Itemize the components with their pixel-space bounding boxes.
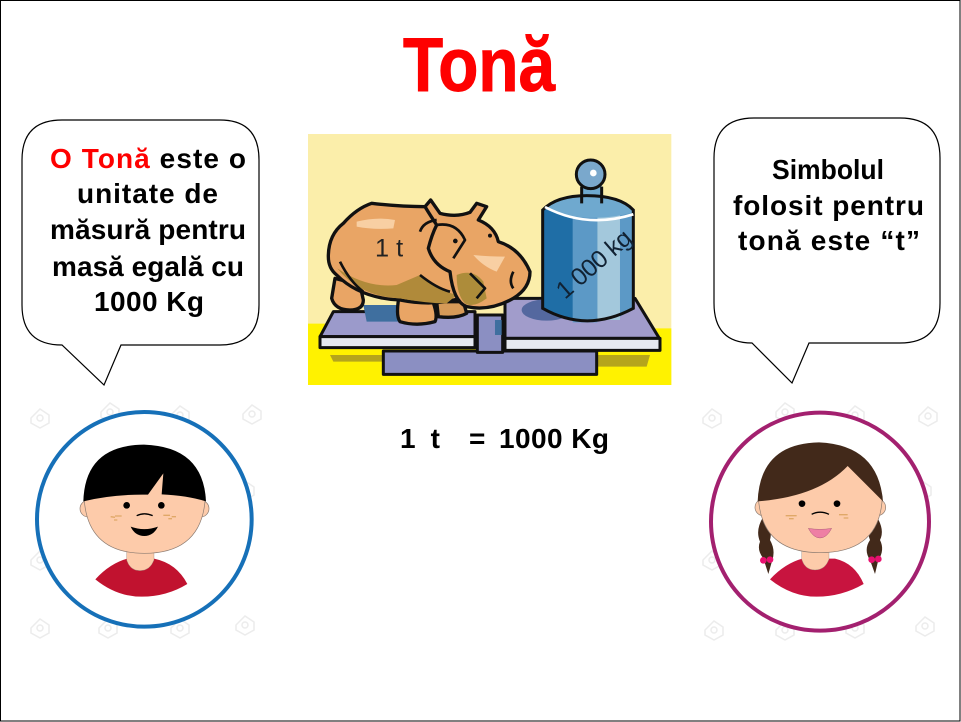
title: Tonă <box>403 23 556 108</box>
speech bubble: symbol: Simbolul <box>772 154 884 185</box>
hippo: 1 t <box>375 235 403 263</box>
speech bubble: definition: O Tonă este o <box>50 143 246 174</box>
speech bubble: symbol: folosit pentru <box>733 190 924 221</box>
speech bubble: definition: 1000 Kg <box>94 286 204 317</box>
equation: = <box>469 423 485 454</box>
scale <box>320 298 660 374</box>
avatar: girl <box>711 413 929 631</box>
hippo <box>328 200 530 324</box>
avatar: boy <box>37 412 252 627</box>
speech bubble: symbol <box>714 118 940 383</box>
weight: 1 000 kg <box>551 225 637 305</box>
weight <box>543 160 637 322</box>
speech bubble: definition <box>22 120 259 385</box>
equation: 1000 Kg <box>499 423 609 454</box>
equation: 1 t <box>400 423 440 454</box>
speech bubble: definition: unitate de <box>77 178 218 209</box>
illustration: hippo and weight on a scale <box>308 134 671 385</box>
speech bubble: definition: masă egală cu <box>52 251 244 282</box>
speech bubble: symbol: tonă este “t” <box>738 225 920 256</box>
equation <box>400 423 609 454</box>
speech bubble: definition: măsură pentru <box>50 214 246 245</box>
